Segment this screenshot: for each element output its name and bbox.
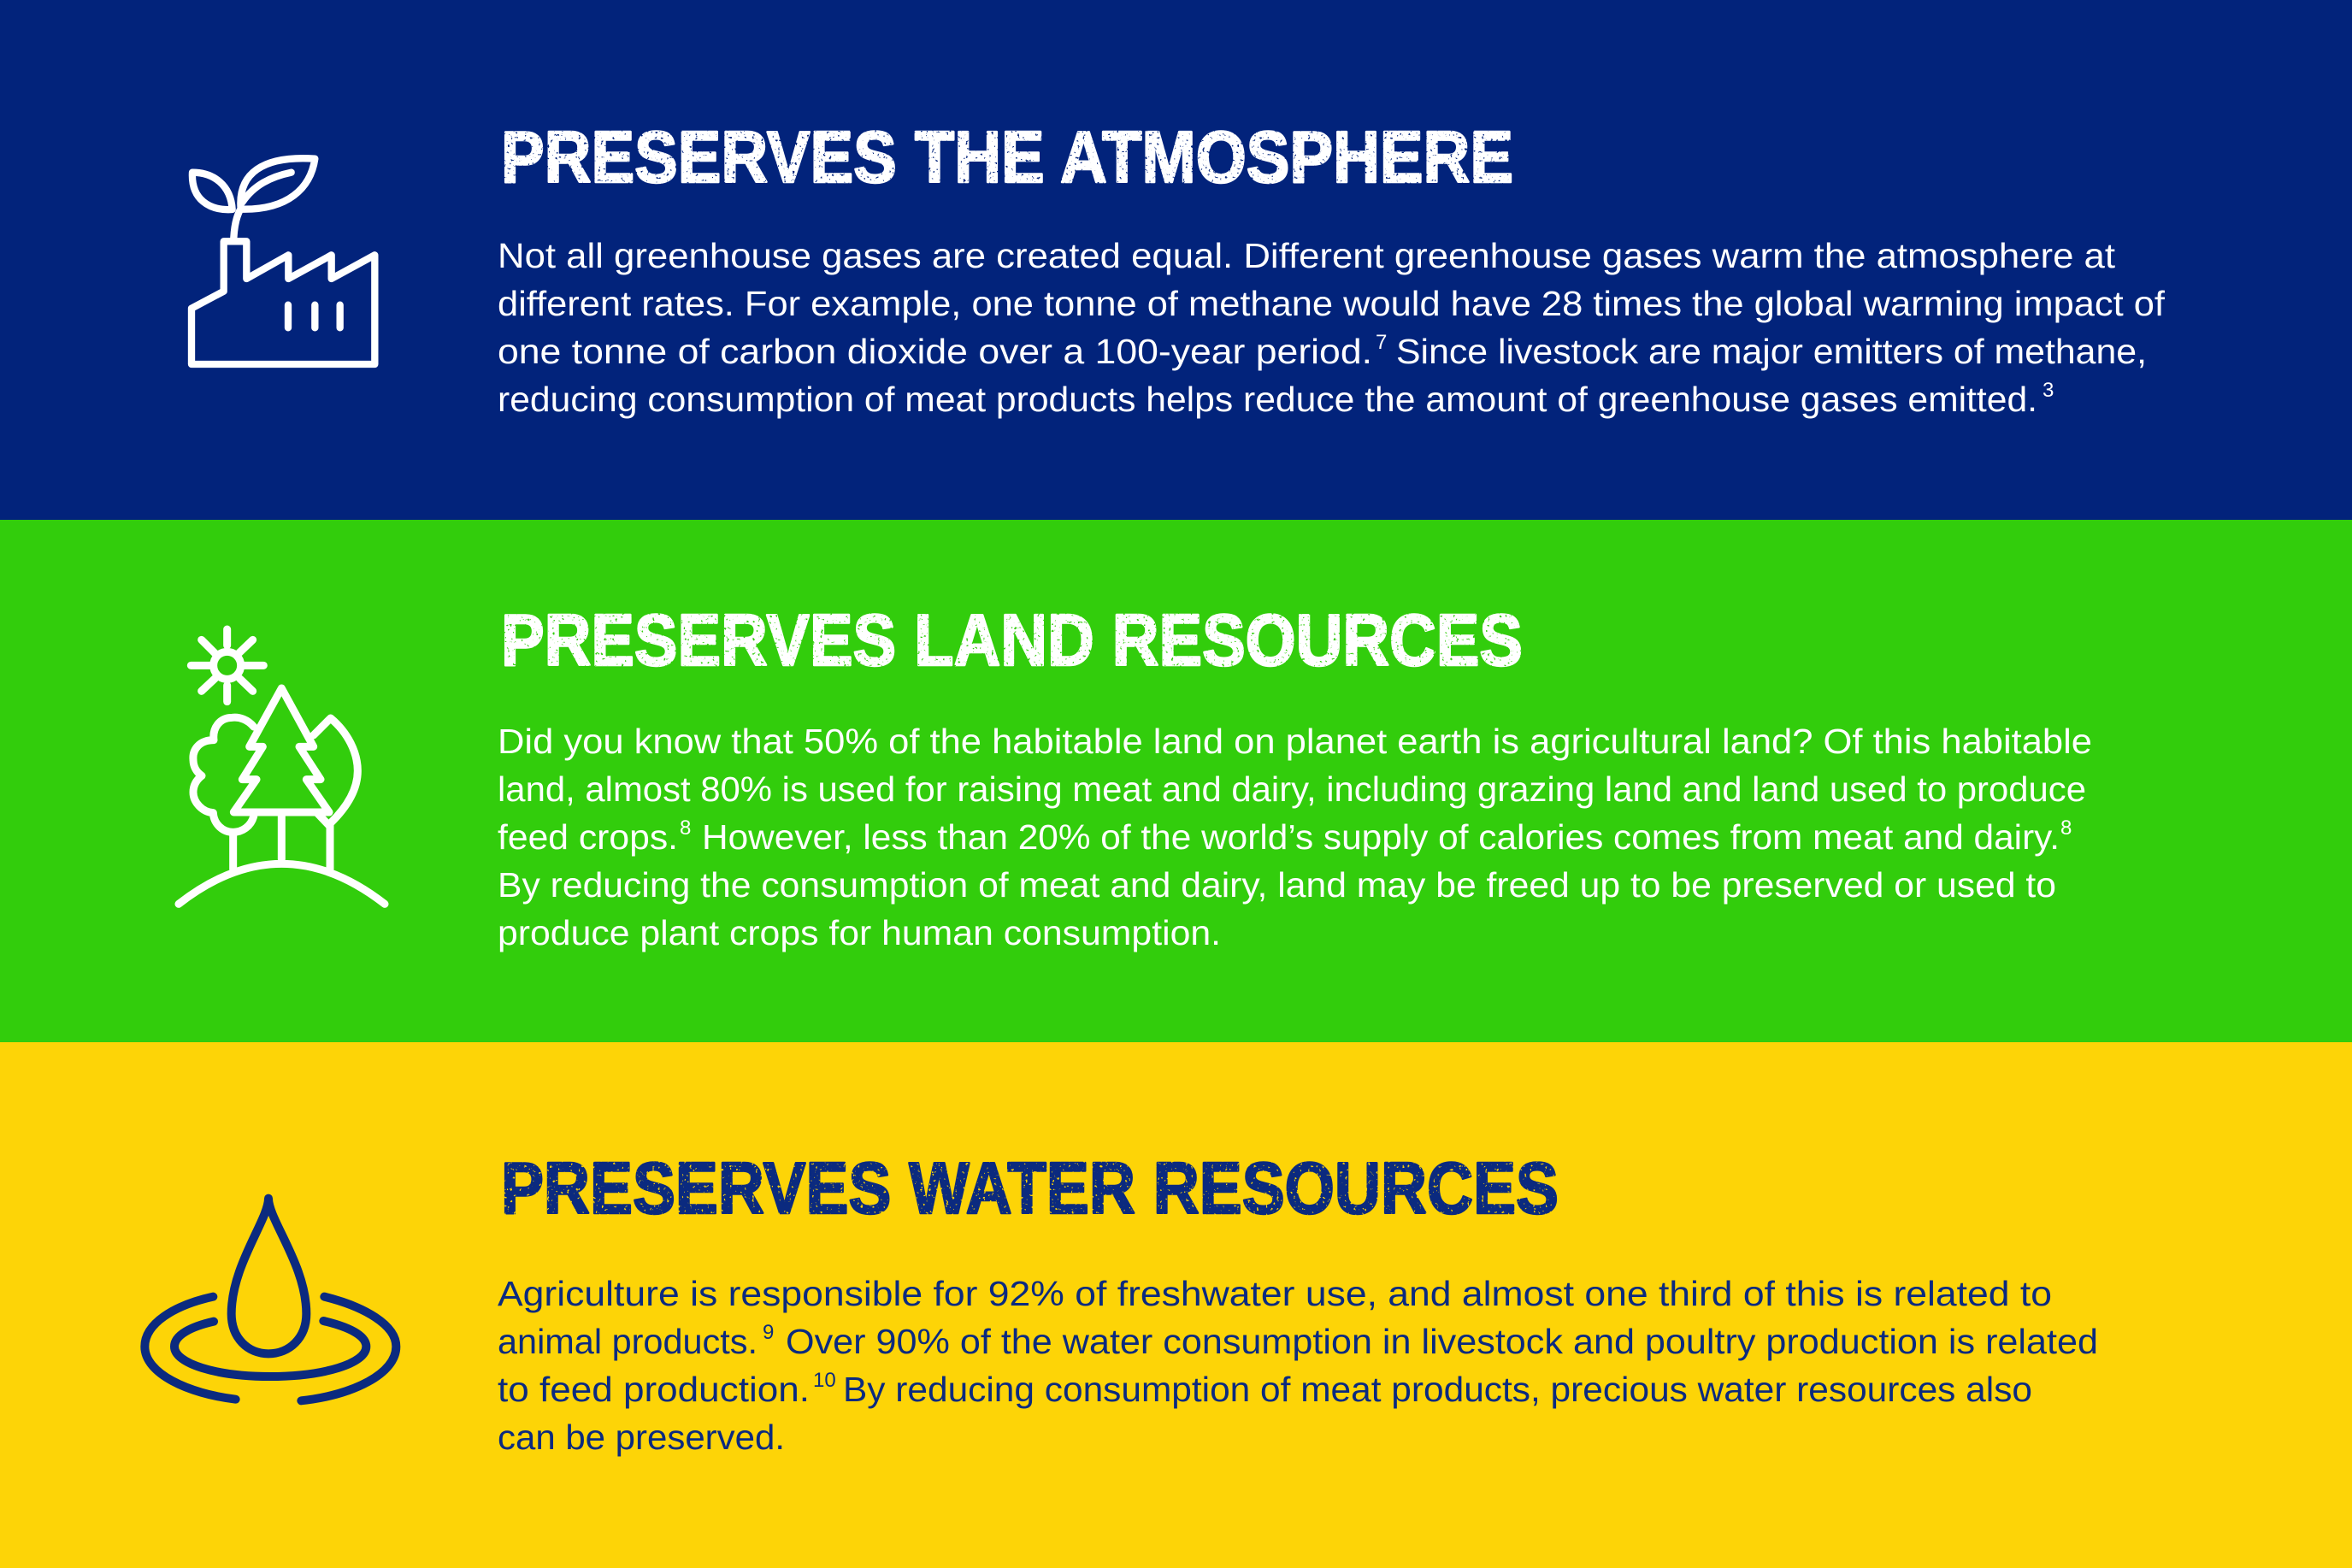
text block: water body: 10 <box>813 1369 836 1392</box>
text block: water body: animal products. <box>498 1322 757 1361</box>
text block: atmosphere body: 3 <box>2043 379 2054 402</box>
text block: land body: Did you know that 50% of the habitable land on planet earth is agricultural land? Of this habitable <box>498 722 2092 761</box>
text block: water body <box>498 1274 2098 1457</box>
text block: atmosphere body <box>498 236 2166 419</box>
text block: atmosphere body: reducing consumption of meat products helps reduce the amount of greenhouse gases emitted. <box>498 380 2037 419</box>
panel background: green <box>0 520 2352 1043</box>
panel: preserves the atmosphere <box>0 0 2352 520</box>
text block: land body: produce plant crops for human consumption. <box>498 913 1221 952</box>
text block: water body: can be preserved. <box>498 1418 785 1457</box>
icon: water drop with ripples <box>144 1199 396 1400</box>
text block: land body: 8 <box>2060 816 2072 840</box>
text block: land body: 8 <box>680 816 691 840</box>
text block: land body: However, less than 20% of the world’s supply of calories comes from meat and dairy. <box>702 817 2060 857</box>
text block: land body <box>498 722 2092 952</box>
panel background: navy <box>0 0 2352 520</box>
panel: preserves land resources <box>0 520 2352 1043</box>
panel background: yellow <box>0 1042 2352 1568</box>
text block: atmosphere body: different rates. For example, one tonne of methane would have 28 times the global warming impact of <box>498 284 2166 323</box>
text block: water body: By reducing consumption of meat products, precious water resources also <box>843 1370 2032 1409</box>
heading: preserves the atmosphere: PRESERVES THE ATMOSPHERE <box>501 117 1513 198</box>
heading: preserves water resources: PRESERVES WATER RESOURCES <box>501 1148 1559 1229</box>
text block: water body: Agriculture is responsible for 92% of freshwater use, and almost one third of this is related to <box>498 1274 2052 1313</box>
text block: atmosphere body: Not all greenhouse gases are created equal. Different greenhouse gases warm the atmosphere at <box>498 236 2116 275</box>
text block: water body: Over 90% of the water consumption in livestock and poultry production is related <box>786 1322 2098 1361</box>
text block: land body: feed crops. <box>498 817 678 857</box>
text block: land body: By reducing the consumption of meat and dairy, land may be freed up to be preserved or used to <box>498 865 2056 905</box>
text block: atmosphere body: 7 <box>1376 331 1387 354</box>
icon: trees, sun and hill <box>179 629 385 904</box>
text block: water body: 9 <box>763 1321 774 1344</box>
heading: preserves land resources: PRESERVES LAND RESOURCES <box>501 600 1523 681</box>
panel: preserves water resources <box>0 1042 2352 1568</box>
text block: land body: land, almost 80% is used for raising meat and dairy, including grazing land and land used to produce <box>498 769 2086 809</box>
icon: factory with sprout <box>192 158 374 364</box>
text block: atmosphere body: one tonne of carbon dioxide over a 100-year period. <box>498 332 1372 371</box>
text block: water body: to feed production. <box>498 1370 810 1409</box>
text block: atmosphere body: Since livestock are major emitters of methane, <box>1396 332 2147 371</box>
